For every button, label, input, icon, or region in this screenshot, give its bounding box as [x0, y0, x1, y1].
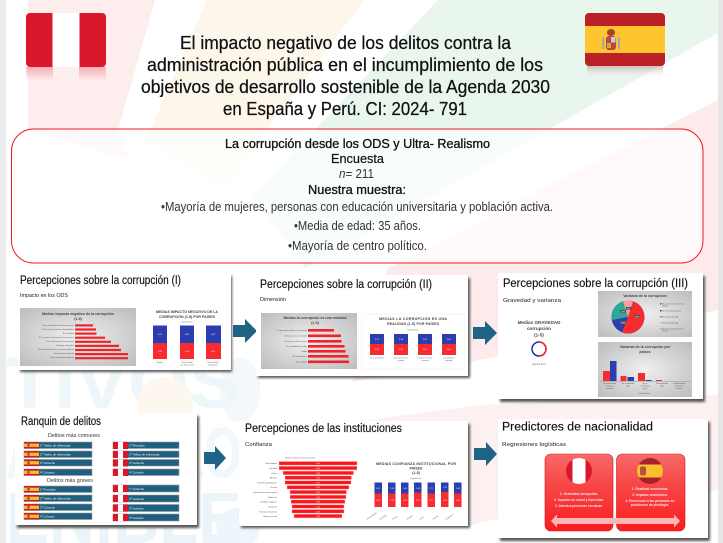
stacked chart: por países: Tiene que ver con [393, 356, 409, 360]
stacked chart: confianza por países: 3,39 [403, 500, 407, 502]
Perú predictors: 1. Gravedad corrupción. [560, 492, 598, 496]
pie chart: varianza: drástica [662, 330, 670, 332]
bar chart: impacto negativo: En la paz y la justicia [56, 344, 75, 347]
stacked chart: confianza por países: Sociedad [379, 515, 387, 521]
rows: Perú comunes [113, 442, 179, 476]
stacked chart: por países: España Perú [182, 320, 192, 324]
stacked chart: confianza por países: 3,19 [390, 500, 394, 502]
bar chart: varianza por países: algo [626, 386, 630, 388]
bar chart: impacto negativo: Medias impacto negativo de la corrupción [42, 312, 114, 316]
bar chart: realidad: En lo político [296, 360, 307, 364]
bar chart: realidad [261, 313, 357, 369]
pie chart: varianza: Se ha mantenido igual [662, 310, 681, 312]
bar chart: varianza por países [598, 342, 692, 397]
rows: España graves: 2º Tráfico de influencias [40, 496, 71, 500]
bar chart: impacto negativo: En la reducción de las desigualdades [43, 328, 74, 331]
stacked chart: por países: el bienestar [208, 364, 218, 366]
pie chart: varianza: Ha aumentado algo [662, 316, 679, 318]
title: objetivos de desarrollo sostenible de la Agenda 2030 [141, 77, 550, 97]
stacked chart: por países: de vida y salud [181, 364, 193, 366]
funnel chart: confianza: Medias confianza institucional (1-5) [285, 456, 315, 460]
rows: España graves: 3º Cohecho [40, 506, 55, 510]
rows: España comunes: 2º Tráfico de influencias [40, 452, 71, 456]
bar chart: varianza por países: Ha aumentado [622, 382, 634, 385]
subheading: graves: Delitos más graves [47, 478, 93, 484]
donut: gravedad [518, 320, 561, 366]
bar chart: varianza por países: Ha aumentado [604, 382, 616, 385]
bar chart: varianza por países: drástica [676, 387, 683, 390]
España predictors: 3. Reservado a las personas en [625, 499, 675, 503]
title: El impacto negativo de los delitos contra la [180, 33, 512, 53]
bar chart: varianza por países: Ha disminuido [673, 383, 685, 385]
stacked chart: por países: Empleo [157, 362, 163, 364]
stacked chart: por países: España Perú [408, 328, 418, 332]
funnel chart: confianza: Gobiernos [268, 506, 277, 508]
card: España [616, 454, 685, 531]
stacked chart: por países: recursos [421, 359, 429, 362]
bar chart: realidad: Las personas perciben la corrupción [277, 329, 307, 332]
stacked chart: confianza por países: Fiscalía [432, 515, 440, 521]
pie chart: varianza: 18% [621, 312, 625, 314]
heading: Percepciones de las instituciones [245, 423, 402, 435]
bar chart: varianza por países: España Perú [640, 392, 650, 395]
title [141, 33, 550, 119]
stacked chart: confianza por países: (1-5) [412, 471, 421, 475]
stacked chart: confianza por países: 3,68 [443, 500, 447, 502]
stacked chart: por países: 4,18 [185, 351, 189, 353]
rows: España graves [24, 486, 92, 520]
background: TIVOS [6, 344, 241, 424]
España predictors [625, 487, 675, 507]
bar chart: impacto negativo: En las infraestructuras y servicios públicos [38, 348, 74, 351]
heading: Percepciones sobre la corrupción (I) [20, 275, 181, 287]
bar chart: varianza por países: igual [643, 388, 648, 390]
bar chart: varianza por países: de manera [605, 384, 615, 388]
stacked chart: confianza por países: 3,47 [376, 500, 380, 502]
Perú predictors: 3. Afecta a personas cercanas. [555, 504, 603, 508]
stacked chart: por países: En lo económico [370, 358, 384, 360]
pie chart: varianza: 25% [621, 322, 625, 324]
bar chart: varianza por países: de manera [674, 384, 684, 388]
bar chart: impacto negativo: En la calidad de vida de las personas [43, 324, 74, 327]
funnel chart: confianza: 2,39 [316, 502, 320, 504]
stacked chart: por países: Persona con más [418, 356, 432, 360]
stacked chart: confianza por países: 2,58 [390, 488, 394, 490]
arrow 4 [474, 442, 497, 466]
rows: España graves: 1º Peculado [40, 488, 56, 492]
funnel chart: confianza: Gobierno central [263, 515, 278, 518]
bar chart: realidad: Es un problema de todos [286, 345, 307, 348]
panel: predictores de nacionalidad [498, 419, 710, 541]
stacked chart: confianza por países: Universidades [366, 511, 377, 521]
rows: Perú comunes: 2º Tráfico de influencias [129, 452, 160, 456]
bar chart: impacto negativo: En la salud y el bienestar de las personas [39, 336, 74, 339]
card: Perú [545, 454, 613, 531]
stacked chart: por países: 4,31 [399, 349, 403, 351]
stacked chart: por países: 4,01 [158, 334, 162, 336]
funnel chart: confianza: 2,45 [316, 492, 320, 494]
stacked chart: por países: En la calidad [182, 362, 192, 364]
stacked chart: por países: 4,06 [185, 334, 189, 336]
bar chart: varianza por países: Ha disminuido [656, 383, 668, 385]
stacked chart: por países: CORRUPCIÓN (1-5) POR PAÍSES [159, 314, 216, 319]
bar chart: varianza por países: Varianza de la corrupción por [620, 345, 671, 349]
rows: Perú comunes: 1º Peculado [129, 444, 145, 448]
heading: Predictores de nacionalidad [502, 422, 653, 434]
stacked chart: por países: 4,21 [375, 339, 379, 341]
stacked chart: confianza por países: Policía [392, 515, 399, 521]
bar chart: impacto negativo: En el empleo [63, 333, 74, 335]
encuesta label: Encuesta [331, 152, 384, 166]
subheading: comunes: Delitos más comunes [48, 433, 100, 439]
arrow 3 [204, 446, 226, 470]
funnel chart: confianza: Policía [271, 473, 278, 475]
stacked chart: confianza por países: 3,27 [429, 500, 433, 502]
funnel chart: confianza: 2,73 [316, 478, 320, 480]
funnel chart: confianza: 3,04 [316, 468, 320, 470]
arrow 2 [473, 321, 497, 345]
background: ARROLLO [6, 414, 241, 494]
rows: Perú graves: 1º Cohecho [129, 487, 144, 491]
panel: encuesta [12, 129, 703, 263]
pie chart: varianza: 5% [627, 308, 630, 310]
stacked chart: por países: 4,20 [211, 351, 215, 353]
funnel chart: confianza: Fiscalía [270, 487, 278, 489]
funnel chart: confianza: 2,29 [316, 512, 320, 514]
bar chart: realidad: En lo económico [293, 356, 307, 358]
rows: Perú graves [113, 485, 179, 521]
pie chart: varianza: 48% [635, 316, 639, 318]
bar chart: impacto negativo: En la educación de las personas [47, 340, 74, 343]
funnel chart: confianza: Unión Europea/América [257, 482, 278, 484]
stacked chart: por países: Las personas [443, 356, 455, 360]
stacked chart: por países: 4,03 [211, 334, 215, 336]
sample bullets: •Mayoría de mujeres, personas con educación universitaria y población activa. [161, 200, 553, 214]
stacked chart: por países [362, 314, 464, 369]
funnel chart: confianza: Alcaldes [270, 476, 277, 480]
funnel chart: confianza: Asociaciones empresariales [253, 491, 277, 494]
pie chart: varianza: Varianza de la corrupción [623, 294, 667, 298]
bar chart: varianza por países: drástica [607, 387, 614, 390]
stacked chart: por países: 4,18 [399, 339, 403, 341]
funnel chart: confianza: Sociedad [269, 468, 277, 470]
funnel chart: confianza: 2,72 [316, 482, 320, 484]
España predictors: 1. Realidad económica. [632, 487, 668, 491]
donut: gravedad: corrupción [527, 326, 551, 331]
stacked chart: confianza por países: Unión [419, 516, 425, 521]
bar chart: realidad: Global [302, 351, 308, 353]
rows: España comunes: 4º Colusión [40, 470, 55, 474]
bar chart: impacto negativo [20, 308, 136, 366]
stacked chart: confianza por países: PAÍSES [410, 466, 423, 470]
rows: España comunes: 1º Tráfico de influencias [40, 444, 71, 448]
rows: España comunes [24, 442, 92, 476]
stacked chart: confianza por países: 2,78 [443, 487, 447, 489]
sample size: n= 211 [339, 167, 374, 181]
sample bullets: •Media de edad: 35 años. [294, 219, 421, 233]
bar chart: realidad: Tiene que ver con el poder [285, 334, 307, 338]
funnel chart: confianza: 3,05 [316, 463, 320, 465]
rows: Perú graves: 3º Colusión [129, 506, 144, 510]
Perú predictors: 2. Impacto en salud y bienestar. [554, 498, 604, 502]
funnel chart: confianza: 2,61 [316, 487, 320, 489]
funnel chart: confianza: Tribunales Supremos [259, 510, 277, 514]
title: en España y Perú. CI: 2024- 791 [223, 99, 467, 119]
Perú predictors [554, 492, 604, 508]
rows: España comunes: 3º Cohecho [40, 461, 55, 465]
double arrow [551, 514, 680, 528]
heading: Percepciones sobre la corrupción (II) [260, 279, 432, 291]
bar chart: varianza por países: mantenido [641, 384, 649, 388]
bar chart: realidad: Medias la corrupción es una realidad [283, 316, 347, 320]
bar chart: impacto negativo: (1-5) [74, 317, 83, 321]
bar chart: realidad: Persona con más recursos [284, 340, 307, 343]
stacked chart: por países: MEDIAS LA CORRUPCIÓN ES UNA [379, 316, 447, 321]
stacked chart: por países: MEDIAS IMPACTO NEGATIVO DE LA [156, 310, 218, 314]
panel: percepciones I [18, 273, 232, 372]
title: administración pública en el incumplimiento de los [147, 55, 543, 75]
bar chart: varianza por países: Se ha [643, 383, 648, 385]
rows: Perú graves: 4º Colusión [129, 516, 144, 520]
stacked chart: por países [153, 310, 221, 366]
funnel chart: confianza: 2,83 [316, 473, 320, 475]
stacked chart: por países: 4,05 [447, 349, 451, 351]
stacked chart: confianza por países [366, 462, 462, 521]
stacked chart: por países: el poder [398, 359, 405, 362]
funnel chart: confianza [253, 456, 357, 518]
stacked chart: confianza por países: España Perú [411, 477, 421, 480]
stacked chart: confianza por países: 2,72 [429, 488, 433, 490]
stacked chart: por países: 4,01 [423, 349, 427, 351]
panel: percepciones II [256, 275, 470, 378]
subheading: Impacto en los ODS [20, 293, 68, 299]
sample heading: Nuestra muestra: [308, 183, 406, 197]
stacked chart: por países: REALIDAD (1-5) POR PAÍSES [387, 321, 440, 326]
stacked chart: por países: En la salud y [208, 362, 218, 364]
heading: Percepciones sobre la corrupción (III) [503, 278, 688, 290]
funnel chart: confianza: Universidades [265, 462, 277, 465]
España predictors: 2. Impacto económico. [632, 493, 668, 497]
pie chart: varianza: drástica [662, 304, 670, 308]
stacked chart: por países: 3,61 [447, 339, 451, 341]
rows: España graves: 4º Colusión [40, 514, 55, 518]
arrow 1 [233, 319, 257, 343]
donut: gravedad: España Perú [532, 363, 547, 366]
subheading: Regresiones logísticas [502, 442, 566, 448]
stacked chart: confianza por países: 2,64 [416, 488, 420, 490]
funnel chart: confianza: 2,31 [316, 506, 320, 508]
bar chart: impacto negativo: En la economía del país [54, 353, 74, 355]
heading: Ranquin de delitos [21, 416, 101, 428]
subheading: Dimensión [260, 297, 286, 303]
stacked chart: por países: 4,25 [375, 349, 379, 351]
stacked chart: por países: perciben [445, 359, 453, 362]
sample bullets [161, 200, 553, 253]
donut: gravedad: (1-5) [534, 332, 544, 338]
rows: Perú graves: 2º Cohecho [129, 497, 144, 501]
bar chart: varianza por países: países [639, 350, 651, 354]
bar chart: realidad: (1-5) [311, 321, 320, 325]
stacked chart: por países: 4,25 [158, 351, 162, 353]
rows: Perú comunes: 4º Colusión [129, 470, 144, 474]
encuesta heading: La corrupción desde los ODS y Ultra- Realismo [225, 137, 490, 151]
stacked chart: confianza por países: Sindicatos [445, 513, 454, 521]
funnel chart: confianza: 2,44 [316, 497, 320, 499]
España predictors: posiciones de privilegio. [631, 503, 669, 507]
panel: ranquin de delitos [15, 413, 199, 528]
pie chart: varianza [598, 291, 692, 337]
pie chart: varianza: Ha disminuido algo [662, 322, 678, 324]
bar chart: varianza por países: algo [660, 386, 664, 388]
stacked chart: confianza por países: 2,61 [376, 488, 380, 490]
funnel chart: confianza: Entidades religiosas [260, 500, 277, 504]
subheading: Gravedad y varianza [503, 298, 562, 304]
funnel chart: confianza: 2,16 [316, 516, 320, 518]
stacked chart: confianza por países: 3,48 [456, 500, 460, 502]
stacked chart: confianza por países: 2,66 [456, 488, 460, 490]
flag: Perú [26, 13, 106, 81]
flag: España [585, 13, 665, 79]
sample bullets: •Mayoría de centro político. [288, 239, 427, 253]
stacked chart: por países: 3,91 [423, 339, 427, 341]
stacked chart: confianza por países: 2,63 [403, 488, 407, 490]
pie chart: varianza: Ha disminuido de manera [662, 328, 684, 330]
panel: percepciones III [498, 273, 705, 402]
panel: percepciones de las instituciones [239, 421, 470, 528]
icon: España flag [637, 458, 663, 484]
stacked chart: confianza por países: 3,52 [416, 500, 420, 502]
bar chart: impacto negativo: En las instituciones públicas [50, 356, 74, 359]
icon: Perú flag [566, 458, 592, 484]
subheading: Confianza [245, 442, 273, 448]
funnel chart: confianza: Sindicatos [268, 496, 277, 499]
rows: Perú comunes: 3º Cohecho [129, 461, 144, 465]
donut: gravedad: Medias GRAVEDAD [518, 320, 561, 325]
stacked chart: confianza por países: MEDIAS CONFIANZA INSTITUCIONAL POR [376, 462, 456, 466]
pie chart: varianza: Ha aumentado de manera [662, 302, 685, 306]
stacked chart: confianza por países: Alcaldes [406, 514, 413, 521]
